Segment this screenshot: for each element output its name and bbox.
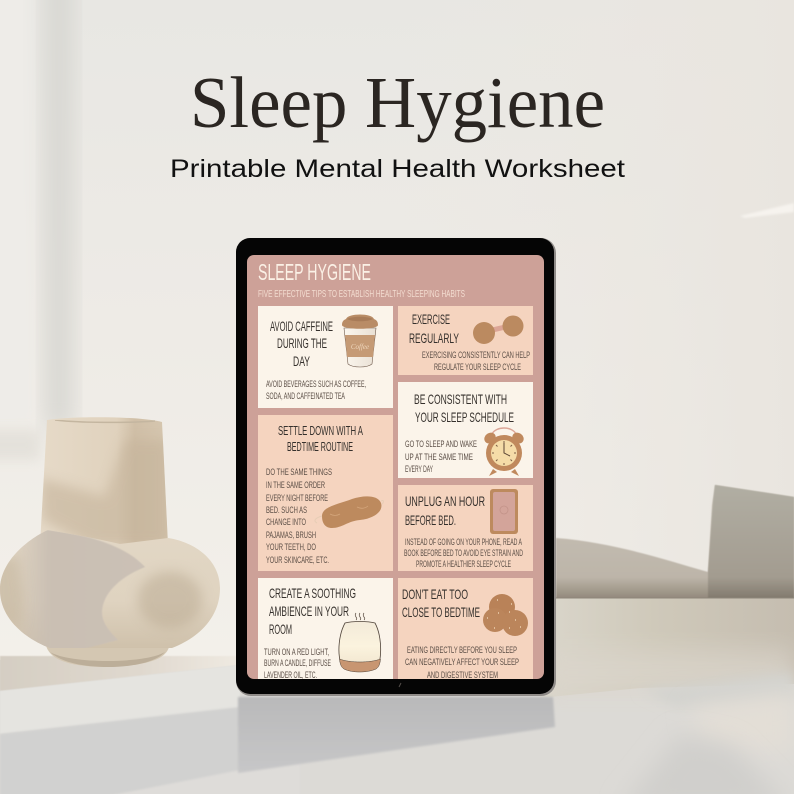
panel: settle down: IN THE SAME ORDER — [266, 480, 325, 491]
panel: unplug: UNPLUG AN HOUR — [405, 493, 485, 509]
floor left light band — [0, 665, 240, 734]
panel: unplug — [398, 485, 533, 571]
panel: create ambience: TURN ON A RED LIGHT, — [264, 647, 329, 658]
panel: consistent schedule: EVERY DAY — [405, 464, 433, 475]
icon: sleep mask — [315, 496, 383, 528]
tablet — [236, 238, 556, 696]
panel: avoid caffeine: AVOID BEVERAGES SUCH AS COFFEE, — [266, 379, 366, 390]
panel: don't eat: EATING DIRECTLY BEFORE YOU SLEEP — [407, 645, 517, 656]
panel: unplug: BOOK BEFORE BED TO AVOID EYE STRAIN AND — [404, 548, 523, 558]
panel: avoid caffeine: DAY — [293, 353, 310, 369]
icon: dumbbell — [473, 316, 524, 344]
panel: settle down: BEDTIME ROUTINE — [287, 439, 353, 454]
wall shadow, right — [556, 485, 794, 600]
panel: consistent schedule: UP AT THE SAME TIME — [405, 452, 473, 463]
title: Sleep Hygiene — [190, 62, 605, 143]
panel: avoid caffeine: AVOID CAFFEINE — [270, 318, 333, 334]
panel: exercise regularly: REGULATE YOUR SLEEP CYCLE — [434, 362, 521, 373]
panel: don't eat: CAN NEGATIVELY AFFECT YOUR SLEEP — [405, 657, 519, 668]
subtitle: Printable Mental Health Worksheet — [170, 155, 625, 183]
worksheet subheading: FIVE EFFECTIVE TIPS TO ESTABLISH HEALTHY SLEEPING HABITS — [258, 289, 465, 300]
panel: create ambience — [258, 578, 393, 681]
floor left shadow — [0, 656, 240, 691]
tablet screen — [247, 255, 544, 681]
panel: consistent schedule: BE CONSISTENT WITH — [414, 391, 507, 407]
icon: cookies — [483, 594, 528, 636]
icon: phone — [490, 489, 518, 534]
icon: alarm clock — [482, 428, 526, 476]
panel: consistent schedule: YOUR SLEEP SCHEDULE — [415, 409, 514, 425]
panel: exercise regularly: EXERCISE — [412, 311, 450, 327]
floor left gray band — [0, 707, 240, 794]
vase body — [0, 530, 220, 648]
panel: settle down: CHANGE INTO — [266, 517, 306, 528]
panel: avoid caffeine — [258, 306, 393, 408]
panel: create ambience: AMBIENCE IN YOUR — [269, 603, 349, 619]
panel: settle down: YOUR TEETH, DO — [266, 542, 316, 553]
panel: exercise regularly — [398, 306, 533, 375]
panel: don't eat: DON'T EAT TOO — [402, 586, 468, 602]
panel: don't eat: AND DIGESTIVE SYSTEM — [427, 670, 498, 681]
panel: consistent schedule — [398, 382, 533, 478]
panel: settle down: DO THE SAME THINGS — [266, 467, 332, 478]
vase neck — [40, 417, 168, 545]
panel: settle down: SETTLE DOWN WITH A — [278, 423, 363, 438]
panel: create ambience: CREATE A SOOTHING — [269, 585, 356, 601]
tablet body — [236, 238, 556, 696]
vase foot — [46, 646, 169, 667]
panel: avoid caffeine: DURING THE — [277, 335, 327, 351]
panel: settle down: YOUR SKINCARE, ETC. — [266, 555, 329, 566]
floor — [0, 597, 794, 794]
vase gray shadow — [24, 530, 144, 648]
icon: diffuser — [339, 613, 381, 672]
panel: exercise regularly: REGULARLY — [409, 330, 459, 346]
panel: exercise regularly: EXERCISING CONSISTENTLY CAN HELP — [422, 350, 530, 361]
panel: unplug: PROMOTE A HEALTHIER SLEEP CYCLE — [416, 559, 511, 569]
worksheet heading: SLEEP HYGIENE — [258, 259, 371, 285]
panel: settle down — [258, 415, 393, 571]
panel: create ambience: BURN A CANDLE, DIFFUSE — [264, 658, 331, 669]
vase — [0, 417, 220, 667]
panel: settle down: PAJAMAS, BRUSH — [266, 530, 316, 541]
panel: create ambience: LAVENDER OIL, ETC. — [264, 670, 317, 681]
icon: coffee cup: Coffee — [351, 343, 369, 351]
panel: don't eat — [398, 578, 533, 681]
tablet reflection — [238, 697, 555, 773]
panel: settle down: EVERY NIGHT BEFORE — [266, 493, 328, 504]
panel: unplug: BEFORE BED. — [405, 512, 456, 528]
panel: unplug: INSTEAD OF GOING ON YOUR PHONE, READ A — [405, 537, 522, 547]
panel: don't eat: CLOSE TO BEDTIME — [402, 604, 480, 620]
panel: settle down: BED. SUCH AS — [266, 505, 307, 516]
panel: create ambience: ROOM — [269, 621, 292, 637]
floor right shaded area — [540, 598, 794, 698]
panel: avoid caffeine: SODA, AND CAFFEINATED TEA — [266, 391, 345, 402]
panel: consistent schedule: GO TO SLEEP AND WAKE — [405, 439, 477, 450]
